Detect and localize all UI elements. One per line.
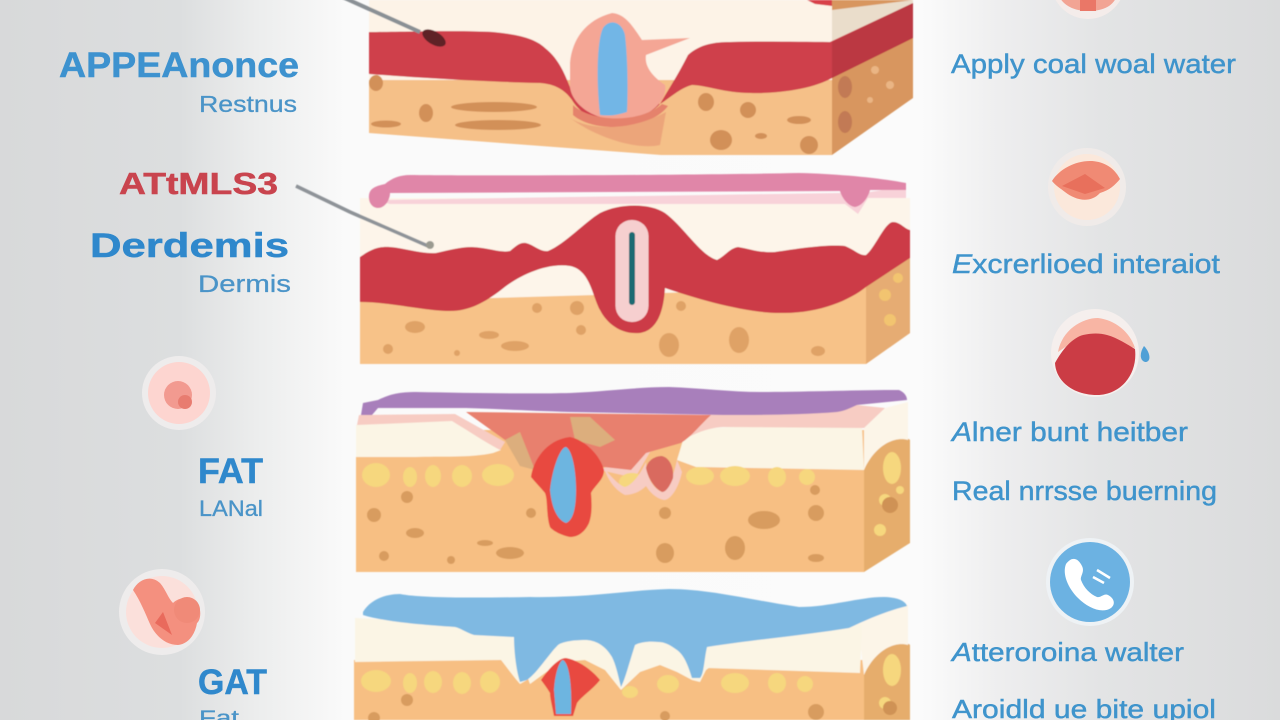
panel: skin block 4 bbox=[354, 589, 910, 720]
text: lanai: LANal bbox=[199, 496, 263, 521]
text: atteroring water: Atteroroina walter bbox=[950, 637, 1184, 667]
heading: atrmls3: ATtMLS3 bbox=[119, 166, 278, 201]
heading: fat: FAT bbox=[198, 452, 263, 491]
heading: gat: GAT bbox=[198, 663, 267, 702]
icon: probe needle 1 bbox=[338, 0, 449, 50]
icon: burn circle bbox=[1048, 148, 1126, 226]
icon: round heart tissue bbox=[119, 569, 205, 655]
icon: round skin spot bbox=[142, 356, 216, 430]
text: other burnt better: Alner bunt heitber bbox=[950, 417, 1188, 447]
text: dermis: Dermis bbox=[198, 271, 291, 298]
text: excretiond interaiot: Excrerlioed interaiot bbox=[952, 249, 1221, 279]
heading: appearance: APPEAnonce bbox=[59, 46, 299, 85]
icon: probe needle 2 bbox=[296, 186, 434, 249]
panel: skin block 1 bbox=[338, 0, 913, 155]
heading: derdemis: Derdemis bbox=[90, 227, 289, 265]
panel: skin block 3 bbox=[356, 387, 910, 572]
icon: top circle bbox=[1051, 0, 1125, 19]
panel: skin block 2 bbox=[296, 173, 910, 364]
icon: phone circle bbox=[1046, 538, 1134, 626]
icon: blister circle bbox=[1051, 309, 1149, 397]
text: real nurse burning: Real nrrsse buerning bbox=[952, 476, 1217, 506]
text: apply cool water: Apply coal woal water bbox=[951, 49, 1236, 79]
text: restnus: Restnus bbox=[199, 91, 297, 117]
